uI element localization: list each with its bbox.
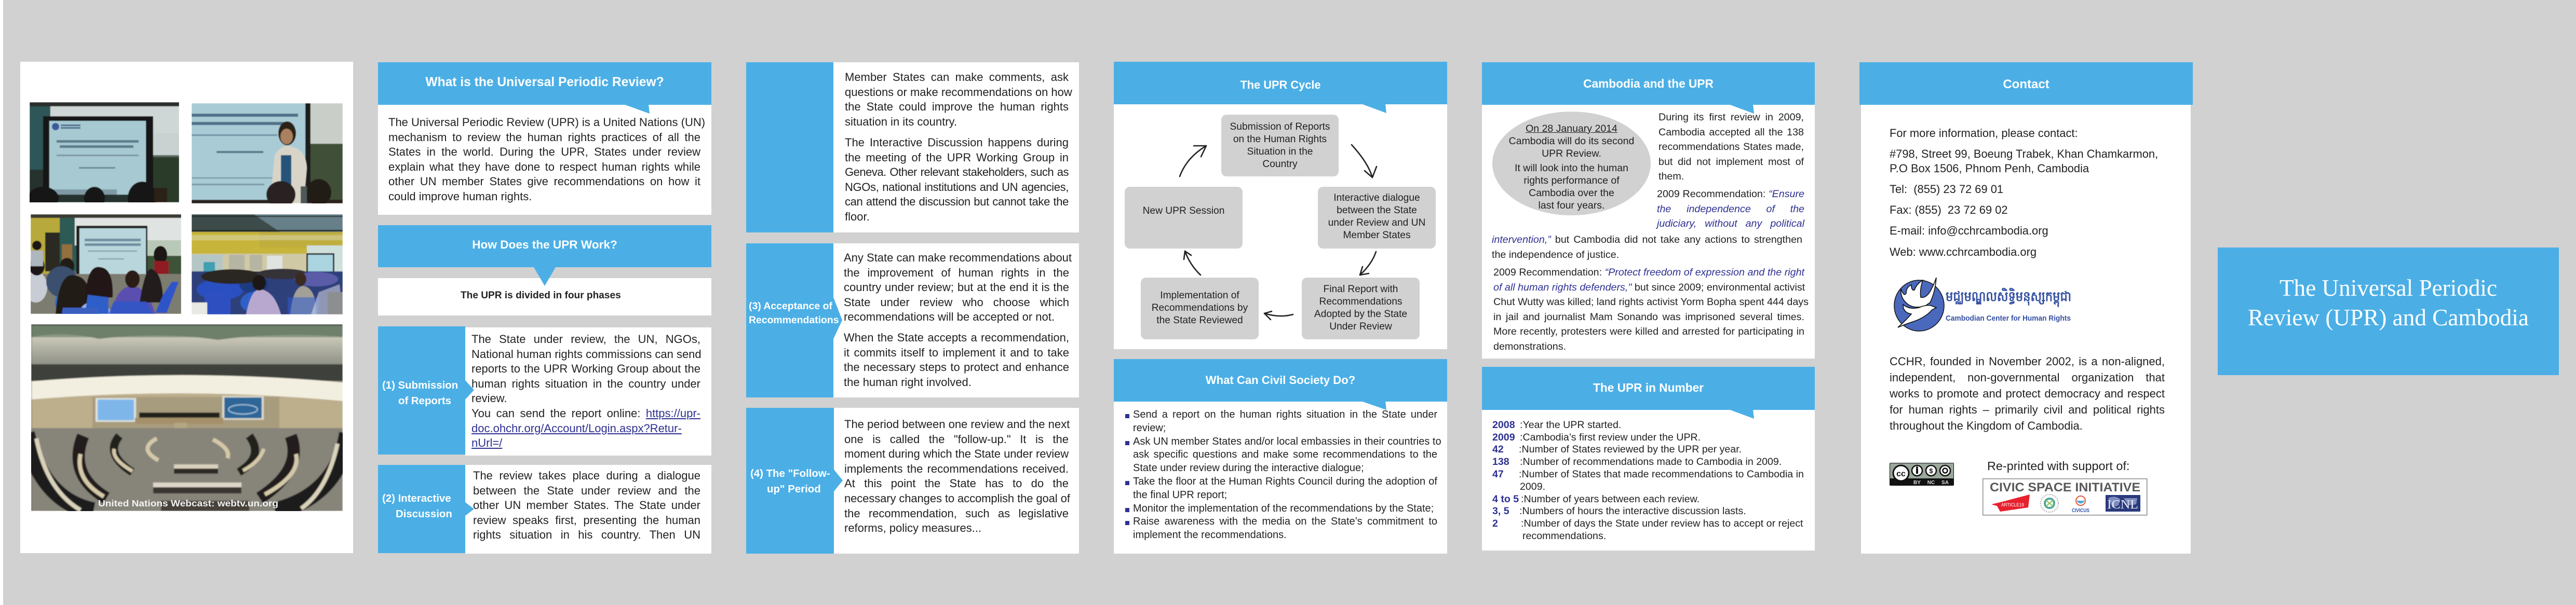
- row: 47: 47: [1492, 469, 1504, 480]
- panel: phase 4 follow-up period: [746, 408, 1079, 554]
- row: 2009: [1482, 431, 1815, 444]
- icon: Creative Commons BY-NC-SA badge: [1890, 463, 1954, 486]
- bulleted list: Raise awareness with the media on the State’s commitment to: [1133, 516, 1437, 527]
- cycle step: interactive dialogue: [1318, 187, 1436, 249]
- panel: Contact: [1859, 62, 2193, 554]
- body background: [834, 408, 1079, 554]
- text: member states: questions or make recommendations on how: [845, 86, 1072, 99]
- row: 138: :Number of recommendations made to Cambodia in 2009.: [1520, 456, 1782, 468]
- logo: CIVICUS: CIVICUS: [2072, 508, 2089, 514]
- text block: one is called the "follow-up." It is the: [844, 433, 1069, 446]
- bulleted list: Take the floor at the Human Rights Council during the adoption of: [1133, 476, 1437, 487]
- text: when accepted: the necessary steps to protect and enhance: [844, 361, 1069, 374]
- cycle step: implementation: the State Reviewed: [1156, 315, 1243, 326]
- logo: ICNL: ICNL: [2107, 498, 2138, 512]
- bulleted list: Send a report on the human rights situation in the State under: [1133, 409, 1437, 420]
- text: defenders recommendation: More recently, protesters were killed and arrested for participating in: [1493, 326, 1804, 337]
- row: 138: 138: [1492, 456, 1509, 468]
- callout date and statement: UPR Review.: [1542, 148, 1601, 159]
- phase label block: [746, 62, 833, 232]
- row: 42: [1482, 443, 1815, 456]
- body background: [465, 327, 711, 456]
- phase label: (4) The "Follow-: [750, 468, 830, 479]
- cycle step: submission of reports: Country: [1262, 159, 1298, 170]
- text: defenders recommendation: Chut Wutty was killed; land rights activist Yorm Bopha spent 444 days: [1493, 296, 1809, 308]
- panel: phase 3 acceptance of recommendations: [746, 243, 1079, 397]
- cycle step: implementation: Implementation of: [1160, 290, 1239, 301]
- cycle step: submission of reports: on the Human Rights: [1233, 134, 1327, 145]
- panel: The UPR in Number: [1482, 367, 1815, 551]
- icon: Creative Commons BY-NC-SA badge: $: [1929, 467, 1933, 475]
- text: about CCHR: works to promote and protect democracy and respect: [1890, 387, 2165, 400]
- row: 2 continued: recommendations.: [1522, 530, 1606, 542]
- row: 42: :Number of States reviewed by the UPR per year.: [1519, 444, 1742, 455]
- heading bar: [1114, 62, 1447, 104]
- logo: CIVICUS: [2072, 496, 2089, 514]
- numbers list: [1482, 419, 1815, 543]
- pointer: [834, 470, 843, 491]
- cycle step: implementation: Recommendations by: [1152, 302, 1248, 313]
- downward pointer: [534, 267, 556, 286]
- callout date and statement: On 28 January 2014: [1526, 123, 1617, 134]
- cycle step: interactive dialogue: Interactive dialogue: [1333, 192, 1420, 203]
- text: first review: them.: [1658, 171, 1684, 182]
- phase label: [382, 493, 452, 520]
- text: about CCHR: independent, non-governmental organization that: [1890, 371, 2165, 384]
- text: any state: recommendations will be accepted or not.: [844, 310, 1055, 323]
- text: defenders recommendation: [1493, 267, 1809, 352]
- text block: The State under review, the UN, NGOs,: [471, 333, 700, 346]
- row: 4 to 5: :Number of years between each review.: [1521, 493, 1700, 505]
- row: 2008: :Year the UPR started.: [1520, 419, 1621, 431]
- logo: Article 19: ARTICLE19: [2001, 502, 2024, 508]
- row: 3, 5: [1482, 505, 1815, 517]
- row: 2009: 2009: [1492, 432, 1515, 443]
- callout detail: rights performance of: [1523, 175, 1620, 186]
- phase label: [382, 380, 458, 407]
- caption: United Nations Webcast: United Nations Webcast: webtv.un.org: [98, 498, 278, 508]
- heading: What Can Civil Society Do?: What Can Civil Society Do?: [1206, 374, 1355, 387]
- text: first review: During its first review in 2009,: [1658, 112, 1804, 123]
- bulleted list: review;: [1133, 422, 1166, 434]
- text: defenders recommendation: 2009 Recommendation: “Protect freedom of expression and the right: [1493, 267, 1804, 278]
- pointer: [465, 502, 474, 516]
- phase label: [750, 468, 830, 495]
- heading: Contact: Contact: [2003, 77, 2049, 91]
- text: about CCHR: throughout the Kingdom of Cambodia.: [1890, 419, 2083, 432]
- bulleted list: Monitor the implementation of the recommendations by the State;: [1133, 503, 1434, 514]
- cycle step: interactive dialogue: under Review and UN: [1328, 217, 1425, 228]
- phases note box: [378, 278, 711, 315]
- phase label block: [378, 326, 465, 455]
- panel: What can civil society do: [1114, 359, 1447, 554]
- text: re-printed with support: Re-printed with support of:: [1987, 459, 2129, 473]
- text: judiciary recommendation: judiciary, without any political: [1657, 218, 1804, 229]
- phase label: [749, 300, 839, 326]
- address: [1890, 147, 2158, 176]
- text: judiciary recommendation: [1655, 188, 1805, 229]
- speech tail: [1363, 402, 1386, 410]
- cycle step: final report: Adopted by the State: [1314, 309, 1407, 320]
- cycle step: final report: Recommendations: [1319, 296, 1402, 307]
- text block: UPR definition: other UN member States give recommendations on how it: [388, 175, 700, 188]
- cycle step: new UPR session: New UPR Session: [1143, 205, 1224, 216]
- text: Geneva discussion: The Interactive Discussion happens during: [845, 136, 1069, 149]
- text: when accepted: the human right involved.: [844, 376, 972, 389]
- row: 2009: :Cambodia’s first review under the UPR.: [1520, 432, 1701, 443]
- text block: At this point the State has to do the: [844, 477, 1069, 490]
- text: defenders recommendation: of all human rights defenders," but since 2009; environmental activist: [1493, 282, 1805, 293]
- text: about CCHR: CCHR, founded in November 2002, is a non-aligned,: [1890, 355, 2165, 368]
- logos: Civic Space Initiative: [1982, 478, 2148, 516]
- text block: necessary changes to accomplish the goal of: [844, 492, 1070, 505]
- web: Web: www.cchrcambodia.org: [1890, 245, 2036, 258]
- text: defenders recommendation: in jail and journalist Mam Sonando was imprisoned several times.: [1493, 311, 1804, 323]
- callout detail: last four years.: [1539, 200, 1604, 211]
- text: Geneva discussion: NGOs, national institutions and UN agencies,: [845, 181, 1069, 194]
- text block: doc.ohchr.org/Account/Login.aspx?Retur-: [471, 422, 682, 435]
- text block: implements the recommendations received.: [844, 462, 1069, 475]
- phase label: (2) Interactive: [382, 493, 451, 504]
- heading bar: [1859, 62, 2193, 105]
- cycle arrows: [1179, 144, 1377, 321]
- cycle step: submission of reports: Submission of Reports: [1230, 121, 1330, 132]
- bulleted list: implement the recommendations.: [1133, 529, 1287, 541]
- phase label: Recommendations: [749, 314, 839, 326]
- heading: The UPR in Number: The UPR in Number: [1593, 381, 1704, 394]
- text: Geneva discussion: the meeting of the UPR Working Group in: [845, 151, 1069, 164]
- cycle step: final report: Final Report with: [1324, 284, 1398, 295]
- text: judiciary recommendation: the independence of the: [1657, 203, 1804, 215]
- logo: World Movement for Democracy: [2041, 494, 2058, 512]
- text block: The review takes place during a dialogue: [473, 469, 700, 482]
- text: judiciary recommendation continued: [1492, 234, 1802, 260]
- icon: Creative Commons BY-NC-SA badge: NC: [1927, 480, 1935, 486]
- body background: [833, 62, 1079, 232]
- contact details: [1890, 126, 2160, 261]
- row: 42: 42: [1492, 444, 1504, 455]
- heading bar: [1482, 62, 1815, 105]
- row: 4 to 5: 4 to 5: [1492, 493, 1519, 505]
- phase label: (1) Submission: [382, 380, 458, 391]
- speech tail: [1730, 410, 1754, 419]
- text: judiciary recommendation: 2009 Recommendation: “Ensure: [1657, 188, 1804, 200]
- text: when accepted: [844, 331, 1069, 389]
- text: member states: situation in its country.: [845, 115, 957, 128]
- callout date and statement: [1509, 123, 1634, 159]
- text: any state: country under review; but at the end it is the: [844, 281, 1069, 294]
- bulleted list: the final UPR report;: [1133, 489, 1227, 501]
- heading: How Does the UPR Work?: How Does the UPR Work?: [472, 238, 617, 251]
- text: when accepted: it commits itself to implement it and to take: [844, 346, 1069, 359]
- row: 2: :Number of days the State under review has to accept or reject: [1521, 518, 1803, 529]
- text block: rights situation in his country. Then UN: [473, 528, 700, 541]
- row: 2008: 2008: [1492, 419, 1515, 431]
- text: member states: the State could improve the human rights: [845, 100, 1069, 113]
- logo: Article 19: [1991, 494, 2030, 512]
- telephone: Tel: (855) 23 72 69 01: [1890, 183, 2003, 196]
- pointer: [833, 297, 842, 339]
- panel: Cambodia and the UPR: [1482, 62, 1815, 359]
- panel: phase 2 interactive discussion: [378, 465, 711, 554]
- heading bar: [378, 62, 711, 105]
- body background: [465, 465, 711, 554]
- address: #798, Street 99, Boeung Trabek, Khan Chamkarmon,: [1890, 147, 2158, 160]
- logo emblem: dove in blue circle: [1894, 278, 1944, 331]
- speech tail: [625, 105, 650, 114]
- icon: Creative Commons BY-NC-SA badge: SA: [1941, 480, 1949, 486]
- row: 3, 5: 3, 5: [1492, 505, 1509, 517]
- heading bar: [378, 225, 711, 267]
- text: about CCHR: [1890, 353, 2165, 434]
- row: 4 to 5: [1482, 493, 1815, 505]
- panel: cover title: [2218, 248, 2559, 375]
- text block: UPR definition: could improve human rights.: [388, 190, 532, 203]
- title: [2218, 273, 2559, 332]
- callout ellipse: [1492, 112, 1651, 215]
- text: any state: Any State can make recommendations about: [844, 251, 1072, 264]
- bulleted list: [1125, 409, 1441, 541]
- text block: moment during which the State under review: [844, 447, 1069, 460]
- fax: Fax: (855) 23 72 69 02: [1890, 203, 2008, 216]
- row: 2: 2: [1492, 518, 1498, 529]
- text block: UPR definition: The Universal Periodic Review (UPR) is a United Nations (UN): [388, 116, 705, 129]
- photo: United Nations Human Rights Council chamber: [31, 324, 343, 511]
- panel: phase 2 continued: [746, 62, 1079, 232]
- text: any state: State under review who choose which: [844, 296, 1069, 309]
- text block: UPR definition: [388, 116, 705, 203]
- heading bar: [1114, 359, 1447, 402]
- text block: UPR definition: explain what they have done to respect human rights while: [388, 160, 700, 173]
- logo: ICNL: [2106, 495, 2140, 512]
- photo: screen in meeting room: [30, 102, 179, 202]
- phase label: of Reports: [398, 395, 451, 407]
- text block: review speaks first, presenting the human: [473, 514, 700, 527]
- email: E-mail: info@cchrcambodia.org: [1890, 224, 2048, 237]
- callout detail: Cambodia over the: [1529, 187, 1614, 199]
- cycle step: interactive dialogue: between the State: [1337, 205, 1417, 216]
- logos: Civic Space Initiative: CIVIC SPACE INITIATIVE: [1990, 480, 2140, 494]
- photo: audience facing speaker: [31, 214, 181, 314]
- speech tail: [1363, 104, 1386, 113]
- text block: reforms, policy measures...: [844, 521, 981, 534]
- text block: between the State under review and the: [473, 484, 700, 497]
- phase label: up" Period: [767, 484, 821, 495]
- text block: [473, 469, 700, 541]
- cycle step: implementation: [1141, 278, 1259, 339]
- text block: review.: [471, 392, 507, 405]
- text block: nUrl=/: [471, 436, 502, 449]
- text block: reports to the UPR Working Group about the: [471, 362, 700, 375]
- panel: phase 1 submission of reports: [378, 326, 711, 456]
- text: Geneva discussion: Geneva. Other relevant stakeholders, such as: [845, 166, 1069, 178]
- row: 47 continued: 2009.: [1520, 481, 1545, 492]
- text: judiciary recommendation continued: intervention,” but Cambodia did not take any actions to strengthen: [1492, 234, 1802, 245]
- row: 2008: [1482, 419, 1815, 431]
- arrow: final report to implementation: [1264, 311, 1293, 320]
- arrow: submission to dialogue: [1352, 145, 1377, 177]
- heading bar: [1482, 367, 1815, 410]
- cycle step: submission of reports: [1221, 115, 1339, 176]
- body background: [833, 243, 1079, 397]
- phase label block: [378, 465, 465, 553]
- panel: photo collage: [20, 62, 353, 553]
- text block: human rights situation in the country under: [471, 377, 700, 390]
- panel: How does the UPR work: [378, 225, 711, 315]
- text: judiciary recommendation continued: the independence of justice.: [1492, 249, 1619, 260]
- text block: [844, 418, 1070, 534]
- text: first review: [1658, 112, 1804, 182]
- cycle step: final report: [1302, 278, 1420, 339]
- logo: Cambodian Center for Human Rights: [1894, 278, 2073, 335]
- phase label block: [746, 408, 834, 554]
- panel: What is the UPR: [378, 62, 711, 215]
- arrow: dialogue to final report: [1360, 252, 1376, 275]
- address: P.O Box 1506, Phnom Penh, Cambodia: [1890, 162, 2089, 175]
- text: Geneva discussion: can attend the discussion but cannot take the: [845, 195, 1069, 208]
- callout detail: It will look into the human: [1515, 162, 1628, 174]
- bulleted list: State under review during the interactive dialogue;: [1133, 462, 1364, 474]
- text: Geneva discussion: floor.: [845, 210, 870, 223]
- text block: [471, 333, 702, 449]
- photo: speaker at the screen: [192, 103, 343, 203]
- phase label block: [746, 243, 833, 397]
- text block: the recommendation, such as legislative: [844, 507, 1069, 520]
- text: when accepted: When the State accepts a recommendation,: [844, 331, 1069, 344]
- phase label: (3) Acceptance of: [749, 300, 832, 312]
- text: defenders recommendation: demonstrations.: [1493, 341, 1566, 352]
- phase label: Discussion: [396, 508, 452, 520]
- text block: The period between one review and the next: [844, 418, 1070, 431]
- callout detail: [1515, 162, 1628, 211]
- text: first review: Cambodia accepted all the 138: [1658, 127, 1804, 138]
- text: any state: the improvement of human rights in the: [844, 266, 1069, 279]
- cycle step: new UPR session: [1125, 187, 1243, 249]
- heading: The UPR Cycle: The UPR Cycle: [1240, 78, 1321, 91]
- arrow: implementation to new session: [1184, 251, 1201, 275]
- text block: other UN member States. The State under: [473, 499, 700, 512]
- heading: Cambodia and the UPR: Cambodia and the UPR: [1583, 77, 1714, 90]
- cycle step: final report: Under Review: [1329, 321, 1392, 332]
- text: Geneva discussion: [845, 136, 1069, 223]
- text block: National human rights commissions can send: [471, 348, 702, 361]
- pointer: [465, 380, 474, 400]
- row: 47: :Number of States that made recommendations to Cambodia in: [1519, 469, 1804, 480]
- text: member states: Member States can make comments, ask: [845, 71, 1069, 84]
- icon: Creative Commons BY-NC-SA badge: BY: [1913, 480, 1921, 486]
- bulleted list: ask specific questions and make some recommendations to the: [1133, 449, 1437, 460]
- text: four phases: The UPR is divided in four phases: [461, 290, 621, 301]
- text: first review: recommendations States made,: [1658, 141, 1804, 153]
- contact intro: For more information, please contact:: [1890, 127, 2078, 140]
- callout date and statement: Cambodia will do its second: [1509, 135, 1634, 147]
- speech tail: [1730, 105, 1754, 114]
- title: Review (UPR) and Cambodia: [2248, 304, 2529, 330]
- panel background: [1861, 62, 2191, 554]
- text block: UPR definition: mechanism to review the human rights practices of all the: [388, 131, 700, 144]
- text block: UPR definition: States in the world. During the UPR, States under review: [388, 145, 700, 158]
- cycle step: interactive dialogue: Member States: [1343, 230, 1411, 241]
- text: any state: [844, 251, 1072, 323]
- cycle step: submission of reports: Situation in the: [1247, 146, 1313, 157]
- arrow: new session to submission: [1180, 146, 1206, 176]
- text: member states: [845, 71, 1072, 128]
- photo: wide view of audience: [192, 214, 343, 314]
- row: 3, 5: :Numbers of hours the interactive discussion lasts.: [1519, 505, 1746, 517]
- text block: You can send the report online: https://upr-: [471, 407, 700, 420]
- panel: UPR cycle: [1114, 62, 1447, 349]
- text: first review: but did not implement most of: [1658, 156, 1804, 168]
- title: The Universal Periodic: [2280, 275, 2497, 301]
- bulleted list: Ask UN member States and/or local embassies in their countries to: [1133, 436, 1441, 447]
- icon: Creative Commons BY-NC-SA badge: cc: [1896, 470, 1906, 478]
- text: about CCHR: for human rights – primarily civil and political rights: [1890, 403, 2165, 416]
- heading: What is the Universal Periodic Review?: What is the Universal Periodic Review?: [425, 75, 664, 89]
